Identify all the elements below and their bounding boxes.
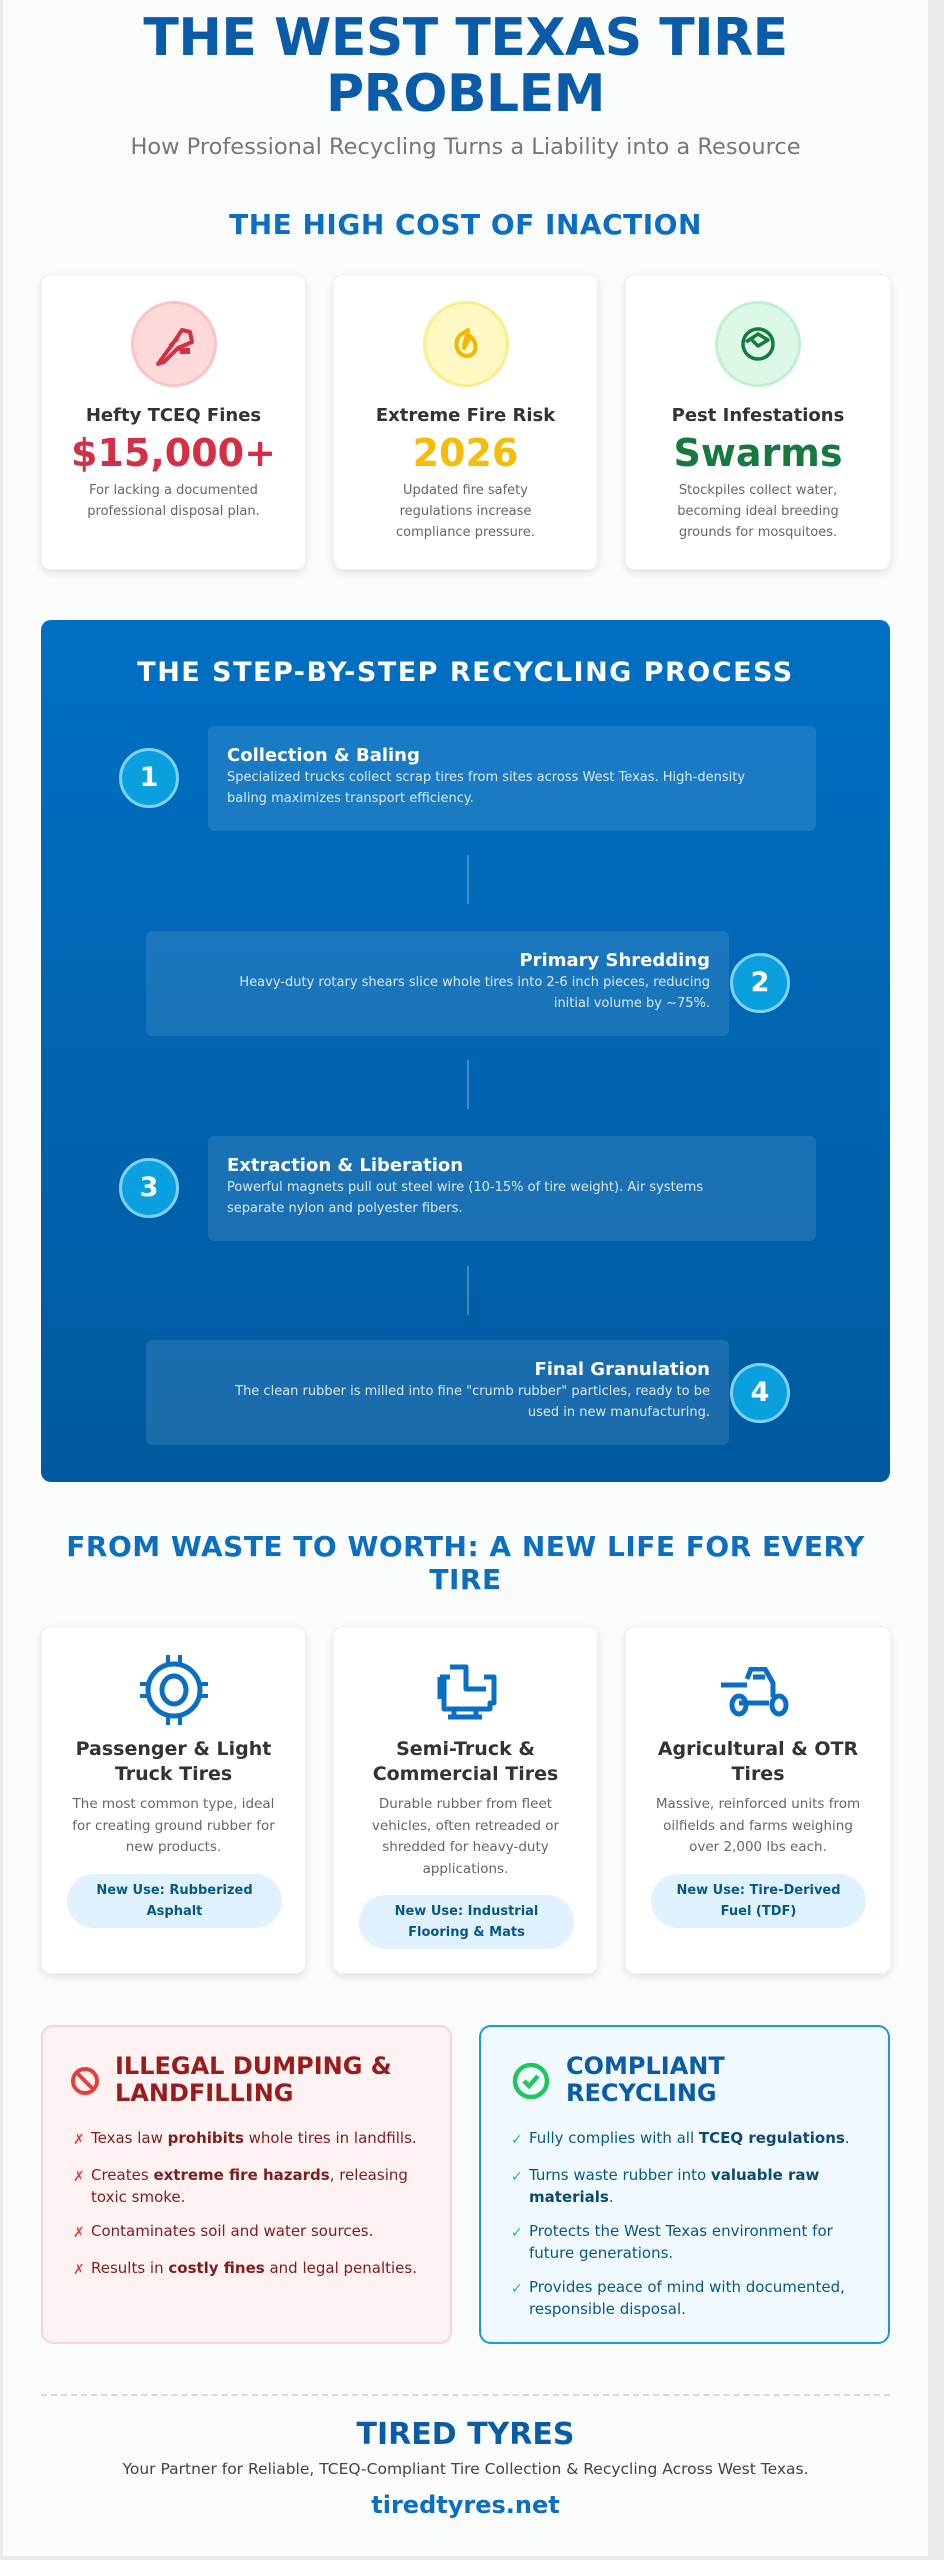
footer brand: TIRED TYRES bbox=[357, 2417, 574, 2452]
step 1 bbox=[208, 726, 816, 831]
badge: Flooring & Mats bbox=[408, 1925, 525, 1940]
text: Tires bbox=[731, 1763, 785, 1785]
heading bbox=[115, 2052, 392, 2107]
heading: waste to worth: FROM WASTE TO WORTH: A NEW LIFE FOR EVERY bbox=[66, 1530, 865, 1563]
card: fines: For lacking a documented bbox=[89, 483, 258, 498]
card: semi-truck tires: Durable rubber from fleet bbox=[379, 1796, 552, 1812]
step 3: Powerful magnets pull out steel wire (10-15% of tire weight). Air systems bbox=[227, 1180, 703, 1195]
panel: illegal dumping bbox=[41, 2025, 452, 2344]
text: Pest Infestations bbox=[672, 405, 844, 426]
step 2: Primary Shredding bbox=[519, 950, 710, 971]
step 3: Extraction & Liberation bbox=[227, 1155, 463, 1176]
connector bbox=[467, 855, 469, 904]
card: fines: $15,000+ bbox=[71, 431, 276, 475]
card: semi-truck tires: shredded for heavy-duty bbox=[382, 1839, 549, 1855]
card: fines bbox=[41, 274, 306, 570]
subtitle: How Professional Recycling Turns a Liability into a Resource bbox=[130, 134, 801, 160]
panel: illegal dumping: Texas law prohibits whole tires in landfills. bbox=[91, 2129, 417, 2147]
panel: illegal dumping: Contaminates soil and water sources. bbox=[91, 2222, 373, 2240]
text: Extreme Fire Risk bbox=[376, 405, 555, 426]
badge bbox=[67, 1874, 282, 1928]
card: pests bbox=[625, 274, 891, 570]
number 2: 2 bbox=[751, 967, 769, 998]
number 1 bbox=[119, 748, 179, 808]
card: passenger tires: for creating ground rubber for bbox=[72, 1818, 275, 1834]
step 1: Specialized trucks collect scrap tires from sites across West Texas. High-density bbox=[227, 770, 745, 785]
card: pests: becoming ideal breeding bbox=[677, 504, 839, 519]
step 3: separate nylon and polyester fibers. bbox=[227, 1201, 463, 1216]
footer tagline: Your Partner for Reliable, TCEQ-Compliant Tire Collection & Recycling Across West Texas. bbox=[122, 2460, 809, 2478]
step 3 bbox=[208, 1136, 816, 1241]
icon: tractor bbox=[721, 1667, 788, 1716]
panel: compliant recycling bbox=[479, 2025, 890, 2344]
card: semi-truck tires: applications. bbox=[423, 1860, 508, 1876]
card: passenger tires: The most common type, ideal bbox=[73, 1796, 274, 1812]
card: agricultural tires: over 2,000 lbs each. bbox=[689, 1839, 827, 1855]
panel: compliant recycling: Turns waste rubber into valuable raw bbox=[529, 2166, 819, 2184]
heading: LANDFILLING bbox=[115, 2079, 294, 2107]
icon: fire bbox=[423, 301, 509, 387]
step 2: Heavy-duty rotary shears slice whole tires into 2-6 inch pieces, reducing bbox=[239, 975, 710, 990]
number 3: 3 bbox=[140, 1172, 158, 1203]
badge: Fuel (TDF) bbox=[721, 1904, 796, 1919]
number 1: 1 bbox=[140, 762, 158, 793]
panel: compliant recycling: materials. bbox=[529, 2188, 614, 2206]
card: passenger tires: new products. bbox=[126, 1839, 221, 1855]
icon: fine bbox=[131, 301, 217, 387]
badge: Asphalt bbox=[147, 1904, 202, 1919]
card: semi-truck tires: vehicles, often retreaded or bbox=[372, 1818, 559, 1834]
panel: illegal dumping: ✗ bbox=[73, 2169, 85, 2185]
card: pests: Stockpiles collect water, bbox=[679, 483, 837, 498]
step 4 bbox=[146, 1340, 729, 1445]
badge bbox=[651, 1874, 866, 1928]
card: agricultural tires bbox=[625, 1626, 891, 1974]
footer url: tiredtyres.net bbox=[371, 2491, 560, 2519]
step 2 bbox=[146, 931, 729, 1036]
icon: check bbox=[512, 2062, 550, 2100]
text: Agricultural & OTR bbox=[658, 1738, 858, 1760]
panel: compliant recycling: Fully complies with all TCEQ regulations. bbox=[529, 2129, 850, 2147]
card: fire: regulations increase bbox=[400, 504, 531, 519]
step 4: The clean rubber is milled into fine "crumb rubber" particles, ready to be bbox=[235, 1384, 710, 1399]
step 4: Final Granulation bbox=[534, 1359, 710, 1380]
panel: recycling process bbox=[41, 620, 890, 1482]
panel: compliant recycling: future generations. bbox=[529, 2244, 673, 2262]
card: fines: professional disposal plan. bbox=[87, 504, 260, 519]
step 1: Collection & Baling bbox=[227, 745, 420, 766]
text: Semi-Truck & bbox=[396, 1738, 535, 1760]
step 4: used in new manufacturing. bbox=[528, 1405, 710, 1420]
panel: illegal dumping: ✗ bbox=[73, 2225, 85, 2241]
list bbox=[73, 2129, 417, 2278]
heading: waste to worth bbox=[66, 1530, 865, 1596]
badge: New Use: Rubberized bbox=[96, 1883, 253, 1898]
card: pests: Swarms bbox=[673, 431, 843, 475]
title: PROBLEM bbox=[326, 64, 605, 124]
text: Hefty TCEQ Fines bbox=[86, 405, 261, 426]
text: Passenger & Light bbox=[76, 1738, 271, 1760]
step 2: initial volume by ~75%. bbox=[554, 996, 710, 1011]
heading bbox=[566, 2052, 725, 2107]
card: fire: 2026 bbox=[413, 431, 518, 475]
number 3 bbox=[119, 1158, 179, 1218]
text bbox=[658, 1738, 858, 1785]
card: agricultural tires: oilfields and farms weighing bbox=[663, 1818, 853, 1834]
heading: high cost: THE HIGH COST OF INACTION bbox=[229, 208, 702, 241]
text bbox=[373, 1738, 558, 1785]
text: Commercial Tires bbox=[373, 1763, 558, 1785]
title bbox=[143, 8, 788, 124]
icon: prohibited bbox=[71, 2067, 99, 2095]
number 2 bbox=[730, 953, 790, 1013]
heading: waste to worth: TIRE bbox=[429, 1563, 502, 1596]
connector bbox=[467, 1060, 469, 1109]
badge bbox=[359, 1895, 574, 1949]
card: fire bbox=[333, 274, 598, 570]
card: pests: grounds for mosquitoes. bbox=[679, 525, 837, 540]
panel: illegal dumping: toxic smoke. bbox=[91, 2188, 185, 2206]
card: agricultural tires: Massive, reinforced units from bbox=[656, 1796, 860, 1812]
text bbox=[76, 1738, 271, 1785]
heading: COMPLIANT bbox=[566, 2052, 725, 2080]
title: THE WEST TEXAS TIRE bbox=[143, 8, 788, 68]
text: Truck Tires bbox=[115, 1763, 232, 1785]
icon: truck bbox=[438, 1664, 496, 1720]
list bbox=[511, 2129, 850, 2318]
card: fire: compliance pressure. bbox=[396, 525, 535, 540]
heading: RECYCLING bbox=[566, 2079, 717, 2107]
panel: illegal dumping: ✗ bbox=[73, 2132, 85, 2148]
card: passenger tires bbox=[41, 1626, 306, 1974]
heading: ILLEGAL DUMPING & bbox=[115, 2052, 392, 2080]
badge: New Use: Industrial bbox=[395, 1904, 538, 1919]
connector bbox=[467, 1266, 469, 1315]
panel: illegal dumping: ✗ bbox=[73, 2262, 85, 2278]
icon: tire bbox=[140, 1655, 208, 1725]
panel: compliant recycling: ✓ bbox=[511, 2225, 523, 2241]
panel: compliant recycling: ✓ bbox=[511, 2281, 523, 2297]
step 1: baling maximizes transport efficiency. bbox=[227, 791, 474, 806]
panel: illegal dumping: Creates extreme fire hazards, releasing bbox=[91, 2166, 408, 2184]
panel: compliant recycling: Provides peace of mind with documented, bbox=[529, 2278, 845, 2296]
panel: compliant recycling: responsible disposal. bbox=[529, 2300, 686, 2318]
number 4 bbox=[730, 1363, 790, 1423]
panel: compliant recycling: ✓ bbox=[511, 2169, 523, 2185]
panel: compliant recycling: Protects the West Texas environment for bbox=[529, 2222, 833, 2240]
card: semi-truck tires bbox=[333, 1626, 598, 1974]
heading: THE STEP-BY-STEP RECYCLING PROCESS bbox=[137, 657, 794, 688]
card: fire: Updated fire safety bbox=[403, 483, 528, 498]
panel: illegal dumping: Results in costly fines and legal penalties. bbox=[91, 2259, 417, 2277]
panel: compliant recycling: ✓ bbox=[511, 2132, 523, 2148]
number 4: 4 bbox=[751, 1377, 769, 1408]
icon: pest bbox=[715, 301, 801, 387]
badge: New Use: Tire-Derived bbox=[676, 1883, 841, 1898]
